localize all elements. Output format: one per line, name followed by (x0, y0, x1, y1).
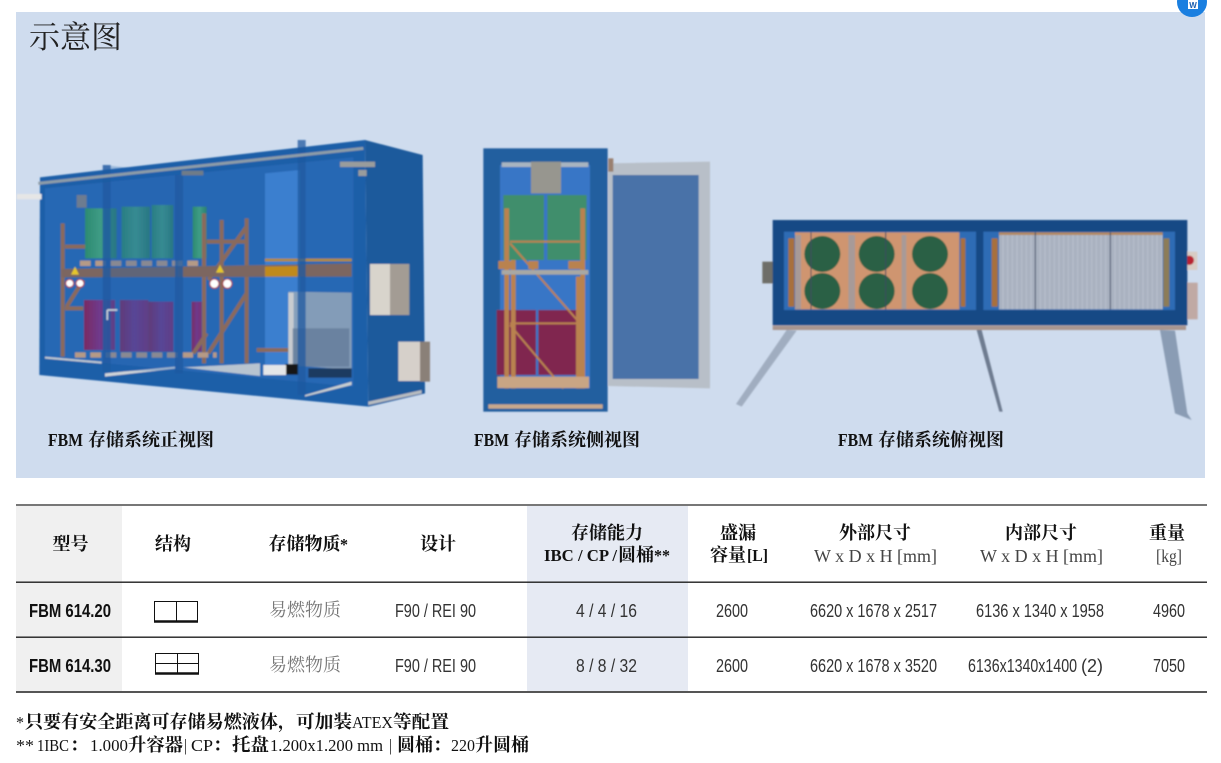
footnotes: * (16, 713, 24, 732)
floor (45, 357, 422, 405)
IBC container (285, 292, 352, 378)
footnotes: 可加装 (296, 711, 352, 732)
open door (608, 158, 710, 388)
row: FBM 614.20: 2600 (716, 601, 748, 621)
row: FBM 614.30: 8 / 8 / 32 (576, 656, 637, 676)
row: FBM 614.20: 易燃物质 (269, 600, 341, 620)
sliding doors (103, 140, 302, 395)
caption: side view: 存储系统侧视图 (514, 429, 640, 450)
row: FBM 614.30: 7050 (1153, 656, 1185, 676)
table header: 容量 (710, 544, 746, 565)
table header: 盛漏 (720, 523, 756, 543)
table header: 型号 (52, 534, 88, 554)
footnotes (16, 711, 529, 755)
footnotes: | (184, 736, 187, 755)
footnotes: 1.000 (90, 736, 128, 755)
drums from above (804, 236, 948, 309)
table header: 内部尺寸 (1005, 523, 1077, 543)
top rail (38, 148, 363, 183)
caption: side view: FBM (474, 430, 509, 450)
footnotes: CP (191, 736, 213, 755)
rail brackets (17, 162, 375, 208)
rack (497, 208, 590, 388)
footnotes: 等配置 (393, 712, 449, 732)
table header: 设计 (420, 534, 456, 554)
row: FBM 614.20: FBM 614.20 (29, 601, 111, 621)
row: FBM 614.30: 6136x1340x1400 (968, 656, 1077, 676)
caption: front view: 存储系统正视图 (88, 429, 214, 450)
grey box (531, 162, 561, 193)
title: 示意图 (29, 20, 122, 55)
storage racks (62, 213, 352, 363)
table: model specifications (16, 504, 1207, 693)
footnotes: 1.200x1.200 mm (270, 736, 383, 755)
row: FBM 614.20: 4960 (1153, 601, 1185, 621)
footnotes: ： (70, 735, 88, 755)
footnotes: 升圆桶 (475, 735, 529, 755)
icon: single level two bay structure (154, 602, 198, 622)
support legs (736, 330, 1192, 420)
footnotes: 只要有安全距离可存储易燃液体， (25, 711, 296, 733)
footnotes: ** (16, 736, 34, 755)
table header: IBC / CP / (544, 546, 617, 565)
left compartment (784, 232, 976, 310)
purple drums (497, 310, 578, 375)
capacity column shading (527, 505, 688, 692)
row: FBM 614.20 (29, 600, 1185, 622)
table header: 存储物质 (268, 533, 340, 554)
row: FBM 614.20: 6620 x 1678 x 2517 (810, 601, 937, 621)
row: FBM 614.30: 6620 x 1678 x 3520 (810, 656, 937, 676)
green drums (85, 205, 207, 258)
table header: [kg] (1156, 546, 1182, 566)
caption: top view: 存储系统俯视图 (878, 429, 1004, 450)
row: FBM 614.20: 4 / 4 / 16 (576, 601, 637, 621)
footnotes: ATEX (352, 713, 393, 732)
footnotes: 圆桶： (397, 735, 451, 755)
illustration: top view of FBM storage system (736, 220, 1198, 420)
table header: 结构 (155, 534, 191, 554)
row: FBM 614.20: F90 / REI 90 (395, 601, 476, 621)
side boxes (762, 252, 1198, 319)
caption: front view: FBM (48, 430, 83, 450)
green drums (503, 195, 587, 260)
footnotes: 1IBC (37, 736, 69, 755)
footnotes: 托盘 (232, 735, 269, 755)
footnotes: 升容器 (128, 734, 183, 755)
container frame (773, 220, 1187, 325)
table header: 圆桶 (618, 545, 654, 565)
illustration: front view of FBM storage system (17, 140, 430, 407)
footnotes: | (389, 736, 392, 755)
row: FBM 614.30: F90 / REI 90 (395, 656, 476, 676)
table header: ** (654, 546, 670, 565)
row: FBM 614.30: FBM 614.30 (29, 656, 111, 676)
table header: [L] (747, 546, 768, 565)
table header: W x D x H [mm] (814, 546, 937, 566)
icon: blue W badge: W (1189, 1, 1197, 10)
panel: schematic views background (16, 12, 1205, 478)
side face of container (365, 140, 425, 407)
table header: 存储能力 (571, 522, 643, 543)
table header: 重量 (1149, 523, 1185, 543)
icon: double level two bay structure (155, 654, 199, 674)
table header: 外部尺寸 (839, 523, 911, 543)
row: FBM 614.30: (2) (1081, 656, 1103, 676)
row: FBM 614.20: 6136 x 1340 x 1958 (976, 601, 1104, 621)
footnotes: ： (213, 735, 231, 755)
icon: blue W badge (1177, 0, 1207, 17)
row: FBM 614.30: 2600 (716, 656, 748, 676)
table header: W x D x H [mm] (980, 546, 1103, 566)
footnotes: 220 (451, 736, 475, 755)
purple drums (84, 300, 202, 352)
model column shading (16, 505, 122, 692)
row: FBM 614.30: 易燃物质 (269, 655, 341, 675)
side mounted boxes (370, 264, 430, 382)
warning signs (66, 265, 232, 288)
table header: * (340, 535, 348, 554)
caption: top view: FBM (838, 430, 873, 450)
right compartment (983, 232, 1175, 310)
illustration: side view of FBM storage system (483, 148, 710, 412)
row: FBM 614.30 (29, 654, 1185, 676)
bottom strip (488, 404, 603, 409)
table header (52, 522, 1185, 566)
